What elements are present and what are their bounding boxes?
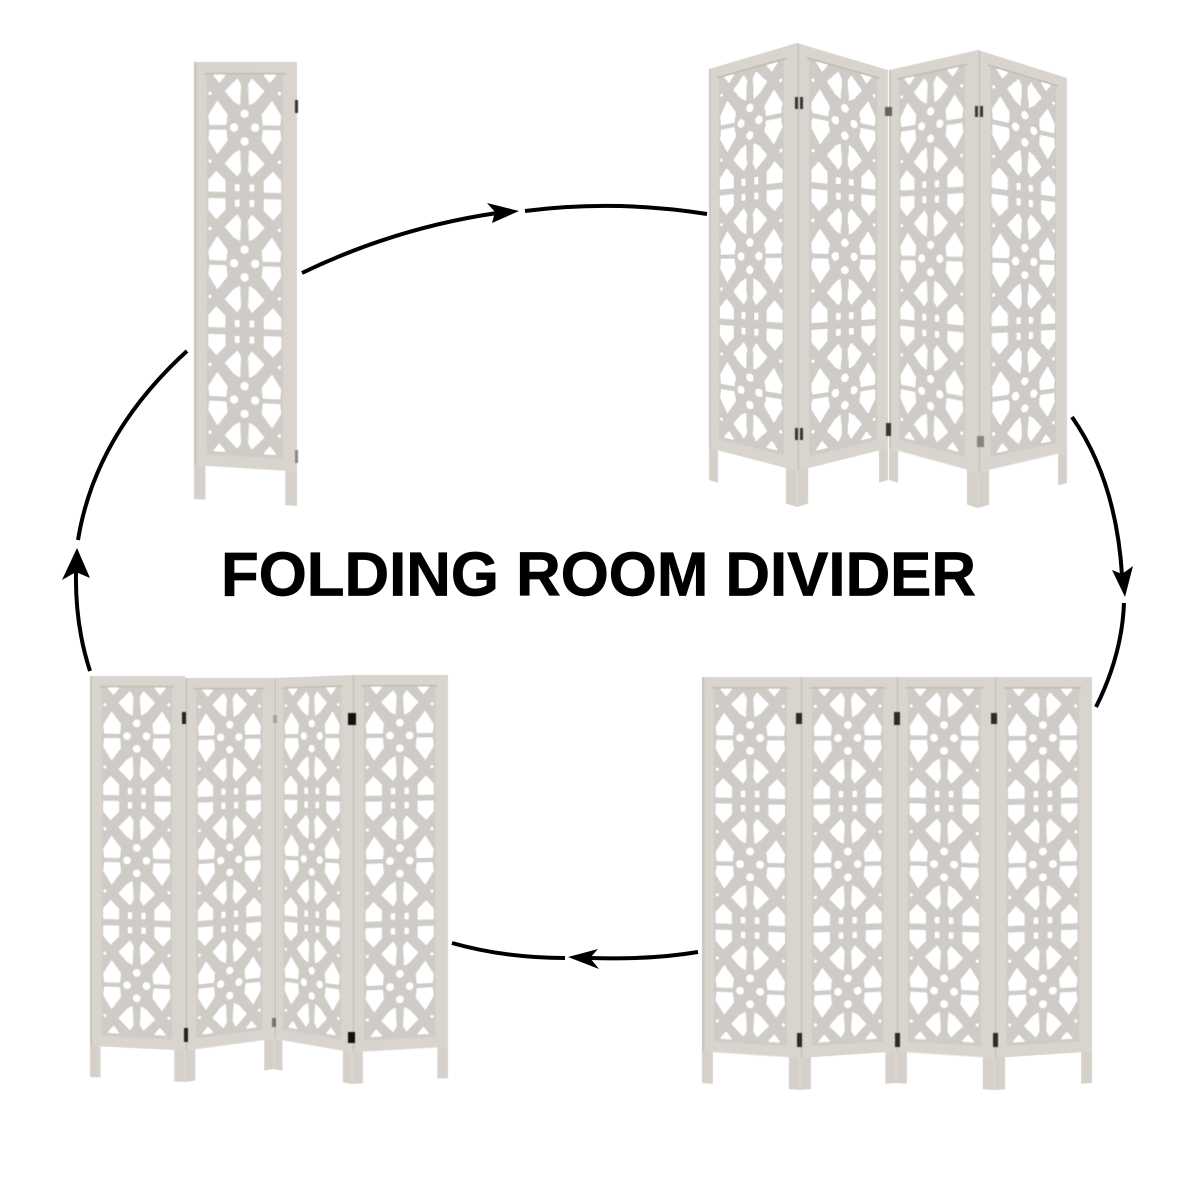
panel: zigzag 2 — [796, 43, 888, 507]
panel: zigzag 3 — [888, 50, 978, 508]
icon: hinges on zigzag screen — [794, 96, 984, 448]
panel: flat 1 — [702, 676, 800, 1090]
title: FOLDING ROOM DIVIDER — [221, 540, 976, 610]
flat divider: four panels fully open — [702, 676, 1092, 1090]
arrow: flat to angled — [452, 943, 698, 969]
panel: angled 1 — [90, 676, 186, 1082]
icon: hinges on angled screen — [181, 711, 357, 1044]
panel: angled 3 — [274, 674, 352, 1084]
panel: folded stack front — [194, 62, 298, 506]
arrow: folded to zigzag — [302, 203, 707, 273]
zigzag divider: four panels in accordion fold — [708, 42, 1068, 508]
partly folded divider: four panels slightly angled — [90, 674, 448, 1084]
panel: flat 3 — [896, 676, 994, 1090]
panel: angled 4 — [352, 674, 448, 1084]
panel: zigzag 1 — [708, 43, 797, 507]
panel: flat 4 — [994, 676, 1092, 1090]
icon: hinges on flat screen — [795, 711, 999, 1048]
panel: flat 2 — [800, 676, 896, 1090]
panel: zigzag 4 — [978, 50, 1068, 508]
folded divider: single closed screen — [194, 62, 299, 506]
arrow: zigzag to flat — [1072, 417, 1133, 707]
icon: hinges on folded screen — [294, 99, 299, 464]
arrow: angled to folded — [62, 351, 187, 671]
panel: angled 2 — [185, 678, 274, 1082]
